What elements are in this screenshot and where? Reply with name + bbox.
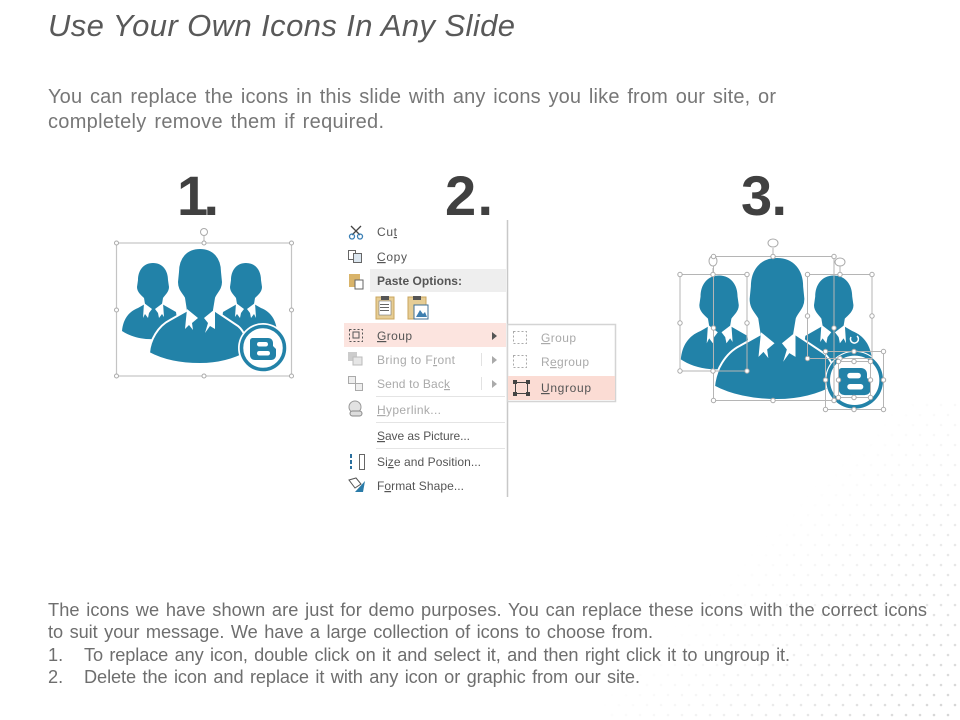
- list item 2: 2.: [48, 667, 63, 687]
- list item 1: To replace any icon, double click on it and select it, and then right click it to ungroup it.: [84, 645, 790, 665]
- blogger badge: [825, 351, 884, 410]
- scaled people and badge: [681, 257, 884, 410]
- instructions text block: [48, 600, 927, 687]
- icon: grouped business people with blogger badge: [114, 228, 294, 378]
- menu item: save as picture: Save as Picture...: [377, 429, 470, 443]
- menu item: copy: Copy: [377, 250, 407, 264]
- icon: ungrouped business people with blogger badge: [678, 239, 886, 412]
- instructions line 1: The icons we have shown are just for demo purposes. You can replace these icons with the correct icons: [48, 600, 927, 620]
- menu right edge: [506, 220, 508, 497]
- submenu: [508, 324, 616, 402]
- menu item: send to back: Send to Back: [377, 377, 451, 391]
- intro paragraph: completely remove them if required.: [48, 111, 384, 133]
- menu item: send to back: [348, 376, 497, 391]
- submenu item: regroup: Regroup: [541, 355, 589, 369]
- instructions line 2: to suit your message. We have a large collection of icons to choose from.: [48, 622, 653, 642]
- menu item: format shape: Format Shape...: [377, 479, 464, 493]
- submenu item: ungroup highlighted: Ungroup: [541, 381, 591, 395]
- intro paragraph: You can replace the icons in this slide with any icons you like from our site, or: [48, 86, 776, 108]
- list item 2: Delete the icon and replace it with any icon or graphic from our site.: [84, 667, 640, 687]
- centre person: [714, 257, 836, 400]
- menu item: cut: [350, 225, 398, 239]
- step number 1: 1.: [177, 164, 219, 227]
- menu item: group highlighted: [344, 323, 506, 347]
- menu item: paste options header: Paste Options:: [377, 274, 462, 288]
- menu item: hyperlink: Hyperlink...: [377, 403, 441, 417]
- selection frame: [114, 228, 294, 378]
- left person: [122, 263, 180, 340]
- background dot pattern: [667, 424, 956, 716]
- paste option icons: [376, 296, 428, 319]
- step number 3: 3.: [741, 164, 787, 227]
- menu item: bring to front: [348, 352, 497, 367]
- menu item: group highlighted: Group: [377, 329, 412, 343]
- centre person: [149, 248, 248, 364]
- menu item: bring to front: Bring to Front: [377, 353, 456, 367]
- intro paragraph: [48, 86, 776, 133]
- menu item: cut: Cut: [377, 225, 398, 239]
- selection frames: [678, 239, 886, 412]
- menu item: size and position: Size and Position...: [377, 455, 481, 469]
- menu item: paste options header: [349, 269, 506, 292]
- submenu item: group: Group: [541, 331, 576, 345]
- title: Use Your Own Icons In Any Slide: [48, 8, 515, 43]
- menu item: copy: [348, 250, 407, 264]
- left person: [681, 275, 752, 370]
- right person: [800, 275, 872, 370]
- right person: [219, 263, 277, 340]
- context menu screenshot: [344, 220, 616, 497]
- blogger badge: [238, 323, 288, 373]
- menu item: hyperlink: [349, 401, 441, 417]
- step number 2: 2.: [445, 164, 493, 227]
- list item 1: 1.: [48, 645, 63, 665]
